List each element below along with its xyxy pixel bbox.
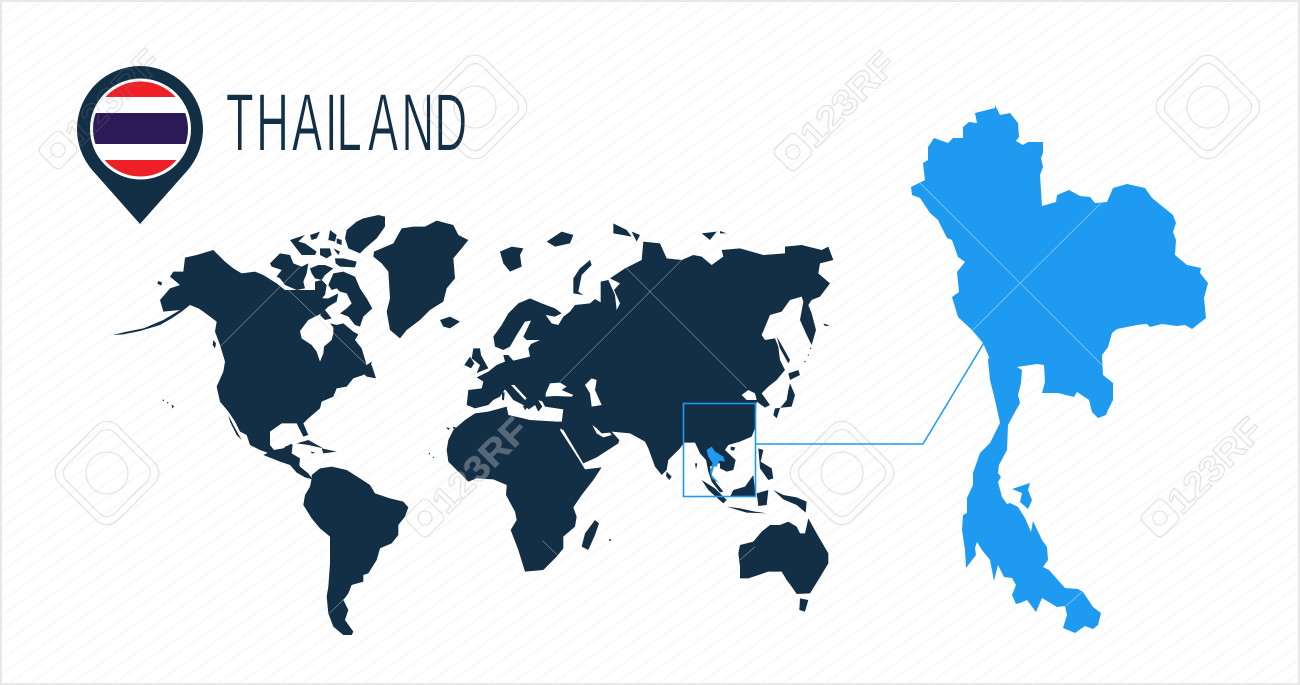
flag ring [90, 78, 191, 180]
south america [303, 467, 408, 635]
watermark logo over africa [401, 409, 536, 544]
north america [113, 250, 376, 465]
hairlines on thailand [920, 183, 1102, 606]
thai flag [90, 80, 191, 179]
watermark icon bottom centre [784, 415, 900, 531]
island [1012, 483, 1032, 509]
selection rectangle [684, 404, 756, 496]
watermark logo top left [34, 41, 169, 176]
watermarks [34, 41, 1271, 544]
central america and caribbean [263, 440, 337, 479]
thailand enlarged map [911, 105, 1208, 633]
world map [113, 215, 833, 635]
canadian arctic islands [270, 215, 385, 327]
watermark logo bottom right: 123RF [1159, 409, 1271, 522]
africa [429, 407, 611, 572]
thailand highlight on world map [707, 447, 725, 483]
watermark icon bottom left [49, 415, 165, 531]
watermark logo top left: 123RF [57, 41, 169, 154]
white hairlines on the map [220, 260, 755, 613]
australia [738, 518, 828, 594]
eurasia [440, 223, 833, 492]
title: THAILAND [226, 77, 467, 169]
connector line [756, 341, 985, 444]
watermark icon top right [1150, 49, 1266, 165]
locator box [684, 404, 756, 496]
pin body [77, 66, 203, 224]
watermark icon top centre [417, 49, 533, 165]
watermark logo over africa: 123RF [424, 409, 536, 522]
watermark logo bottom right [1136, 409, 1271, 544]
map pin with thai flag [77, 66, 203, 224]
greenland [373, 221, 468, 338]
watermark logo top middle [769, 43, 904, 178]
inland seas [511, 378, 757, 437]
watermark logo top middle: 123RF [792, 43, 904, 156]
southeast asia islands and australia [666, 447, 756, 503]
